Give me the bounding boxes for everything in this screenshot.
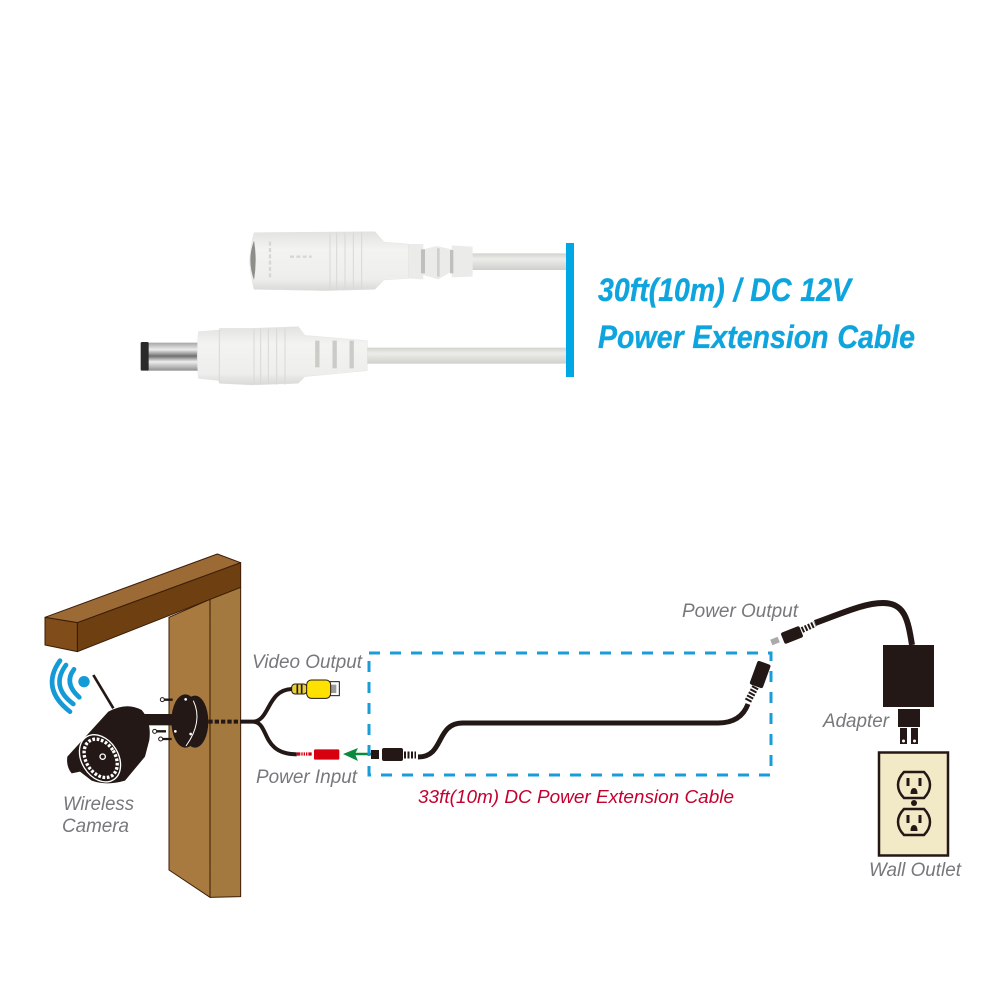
labels: Adapter <box>822 710 890 732</box>
labels: Wireless <box>63 793 134 815</box>
male DC connector photo <box>141 327 567 385</box>
wireless camera with mount <box>67 675 238 790</box>
title: cable specification <box>598 272 915 355</box>
adapter with cable <box>770 603 934 744</box>
dashed extension cable frame <box>369 653 771 775</box>
icon: wifi signal <box>52 661 90 712</box>
extension cable <box>371 660 771 761</box>
wall outlet <box>879 752 948 856</box>
labels <box>62 600 963 881</box>
title: cable specification: Power Extension Cable <box>598 319 915 355</box>
labels: Power Output <box>682 600 800 622</box>
Y cable with video and power plugs <box>240 680 339 760</box>
red cable caption: 33ft(10m) DC Power Extension Cable <box>418 786 734 807</box>
labels: Power Input <box>256 766 359 788</box>
wooden beam and post <box>45 554 241 897</box>
female DC connector photo <box>249 232 567 291</box>
green arrow <box>343 748 372 761</box>
blue bracket bar <box>566 243 574 377</box>
labels: Camera <box>62 815 129 837</box>
labels: Video Output <box>252 651 364 673</box>
labels: Wall Outlet <box>869 859 963 881</box>
title: cable specification: 30ft(10m) / DC 12V <box>598 272 853 308</box>
